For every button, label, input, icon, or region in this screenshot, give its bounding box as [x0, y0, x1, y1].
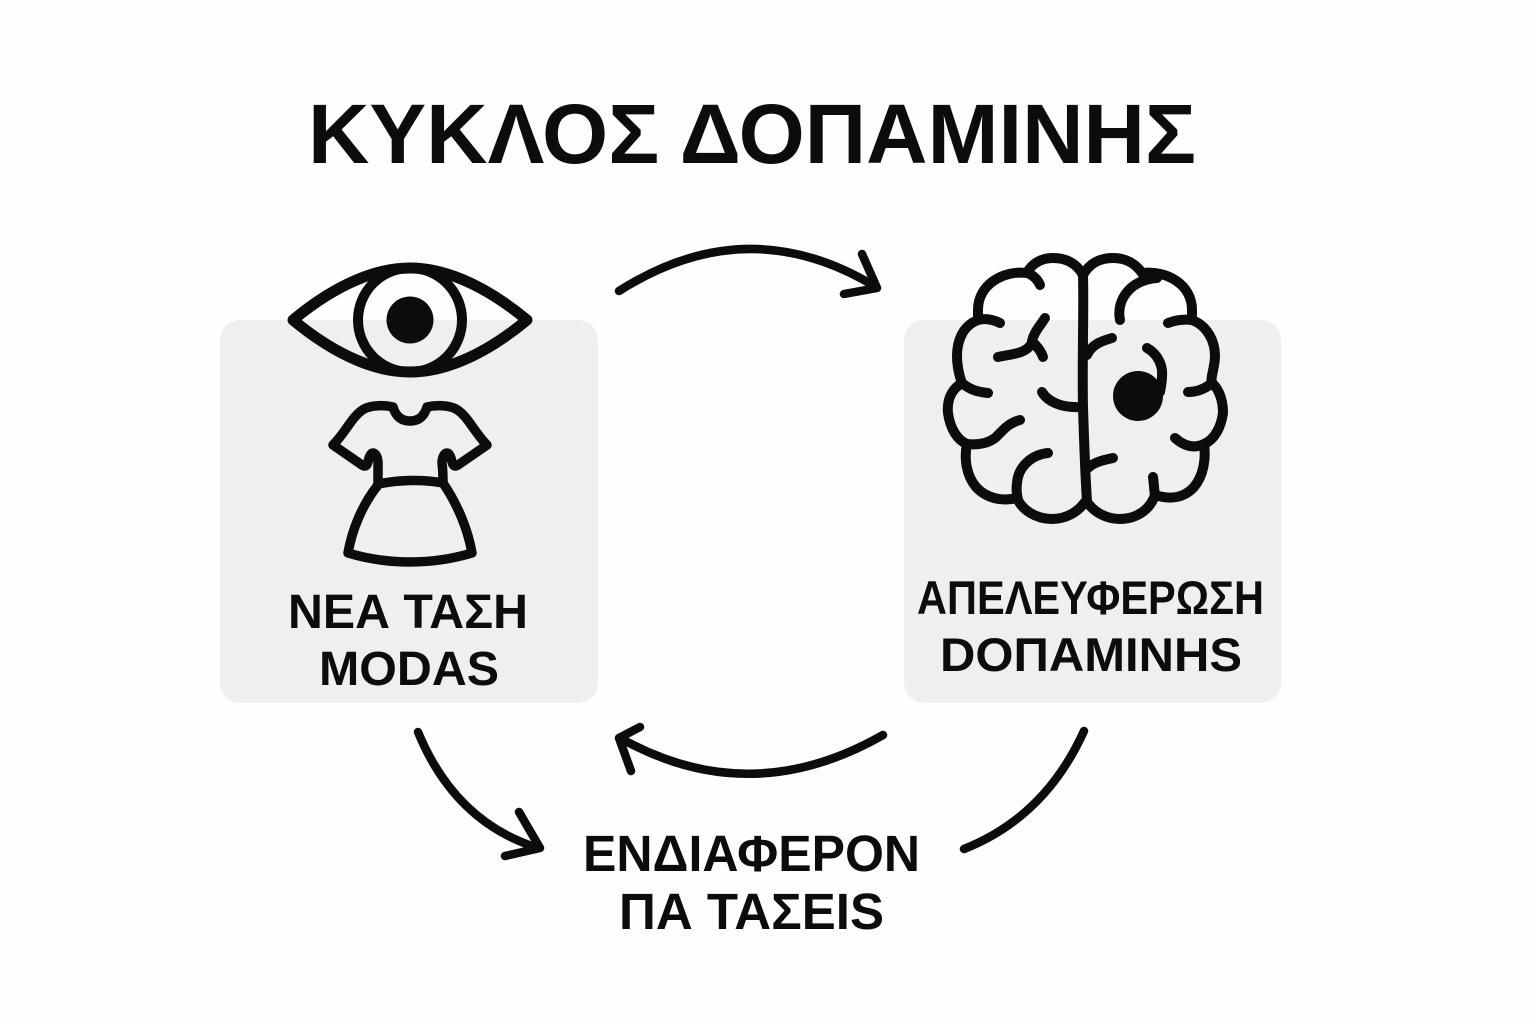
panel: dopamine release [904, 320, 1281, 703]
icon: dress [333, 406, 487, 562]
icon: eye [293, 268, 527, 372]
label: interest in trends: ΕΝΔΙΑΦΕΡΟΝ [583, 825, 920, 882]
title: ΚΥΚΛΟΣ ΔΟΠΑΜΙΝΗΣ [308, 87, 1196, 181]
label: interest in trends [583, 825, 920, 940]
label: interest in trends: ΠΑ ΤΑΣΕΙS [619, 883, 884, 940]
midline [1083, 275, 1087, 502]
right hemisphere outline [1083, 258, 1223, 519]
label: dopamine release: ΑΠΕΛΕΥΦΕΡΩΣΗ [917, 571, 1264, 624]
icon: brain [948, 258, 1223, 519]
panel: new fashion trend [220, 320, 598, 703]
label: dopamine release [917, 571, 1264, 681]
label: new fashion trend: ΝΕΑ ΤΑΣΗ [288, 586, 528, 639]
left folds [1028, 273, 1040, 285]
right folds [1119, 278, 1157, 320]
arrow: trend to dopamine release [619, 249, 877, 294]
arrow: trend to interest [418, 732, 540, 856]
arrow: interest to dopamine release [964, 731, 1084, 849]
left hemisphere outline [948, 258, 1085, 519]
label: dopamine release: DΟΠΑΜΙΝΗS [940, 628, 1242, 681]
music note [1147, 348, 1162, 392]
label: new fashion trend [288, 586, 528, 696]
arrow: dopamine release to interest [619, 727, 883, 774]
label: new fashion trend: MODAS [319, 643, 499, 696]
